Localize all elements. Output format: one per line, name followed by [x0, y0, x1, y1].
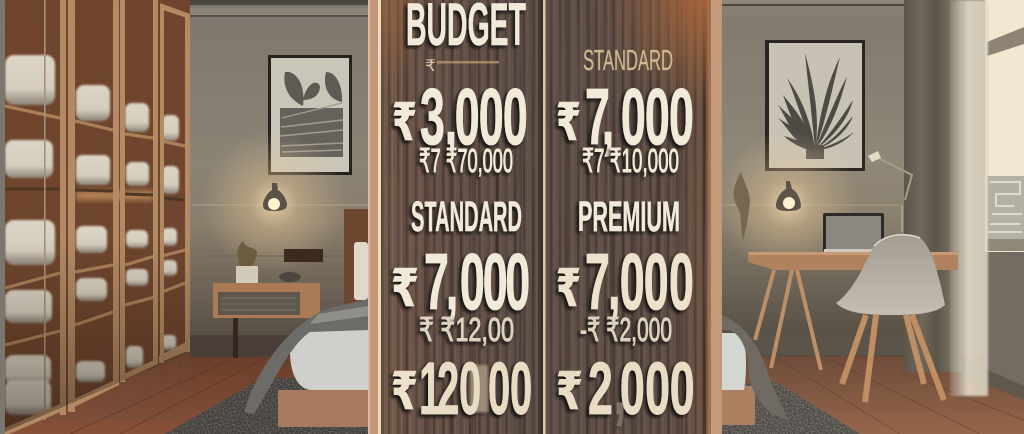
price 2,000: ,	[614, 347, 626, 431]
wardrobe back panel	[0, 0, 190, 434]
floor left	[10, 352, 296, 434]
framed art left	[268, 55, 352, 175]
wall lamp right	[726, 137, 850, 252]
lower wall by window	[986, 356, 1024, 386]
price 2,000: 000	[620, 347, 695, 431]
price 7,000 top: 7,000	[585, 71, 694, 161]
price 2,000: ₹	[556, 362, 583, 422]
small price range right: -₹ ₹2,000	[580, 311, 672, 348]
wardrobe left edge	[0, 0, 5, 434]
door frames	[0, 0, 190, 434]
back wall left	[190, 5, 368, 335]
faded rupee dash: ₹	[425, 58, 436, 75]
city view	[987, 176, 1024, 239]
right room scene	[716, 0, 1024, 434]
price 12000: ₹	[391, 362, 418, 422]
rug left	[165, 378, 368, 434]
small price range budget: ₹7 ₹70,000	[419, 142, 513, 179]
wall rail left	[192, 204, 368, 206]
art print	[280, 72, 343, 157]
price 3,000: 3,000	[420, 71, 528, 161]
wardrobe lower shade	[5, 261, 190, 432]
rug right	[722, 382, 860, 434]
premium heading: PREMIUM	[578, 193, 680, 241]
desk	[748, 252, 958, 370]
faded rupee dash	[425, 58, 499, 75]
LED shelf glow	[76, 191, 154, 200]
price 7,000 right: 7,000	[585, 236, 694, 326]
baseboard by window	[987, 370, 1024, 400]
laptop	[823, 213, 886, 252]
wooden price board	[368, 0, 722, 434]
baseboard right	[759, 350, 904, 355]
board outer frame	[368, 0, 722, 434]
wardrobe grain	[0, 0, 190, 420]
window	[985, 0, 1024, 252]
board wood surface	[381, 0, 708, 434]
palm illustration	[778, 53, 854, 159]
small price range standard: ₹7 ₹10,000	[582, 142, 679, 179]
floor right	[722, 356, 1024, 434]
shelves	[5, 106, 185, 345]
price 7,000 left: ₹	[391, 259, 419, 319]
price 7,000 left: 7,000	[424, 236, 530, 326]
small price range left: ₹ ₹12,00	[419, 311, 514, 348]
nightstand	[213, 272, 320, 358]
price 2,000: 2	[588, 347, 613, 431]
potted plant	[236, 241, 258, 283]
wardrobe	[0, 0, 190, 434]
wall rail right	[722, 204, 900, 206]
price 7,000 right: ₹	[556, 259, 581, 319]
back wall right	[722, 16, 904, 356]
price 3,000: ₹	[392, 93, 417, 153]
framed art right	[765, 40, 865, 171]
price 12000: 12000	[419, 347, 532, 430]
dark curtain	[904, 0, 962, 372]
rail and switch	[208, 249, 345, 262]
left room scene	[0, 0, 368, 434]
desk lamp	[868, 151, 912, 232]
folded linens	[5, 55, 179, 415]
baseboard left	[190, 335, 290, 357]
bed right	[722, 315, 788, 425]
price 7,000 top: ₹	[556, 93, 581, 153]
bed left	[244, 209, 368, 427]
ceiling and moulding left	[186, 0, 368, 17]
wall lamp left	[212, 136, 336, 267]
center divider	[543, 0, 546, 434]
column standard heading top: STANDARD	[583, 45, 673, 77]
wooden price board: STANDARD	[411, 193, 522, 241]
chair	[836, 235, 945, 402]
price 2,000	[556, 347, 695, 431]
dried plant	[734, 172, 750, 240]
moulding right	[722, 0, 904, 6]
sheer curtain	[950, 0, 988, 396]
